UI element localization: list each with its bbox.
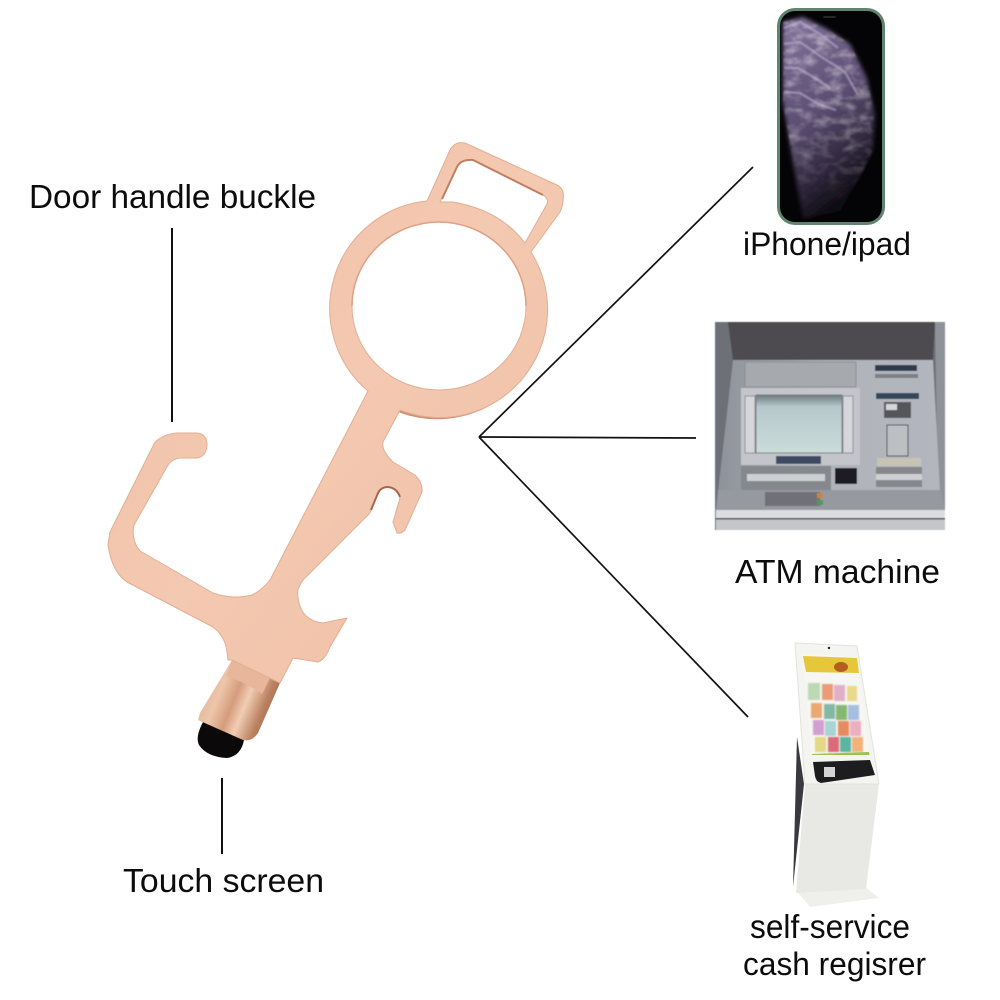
label: iPhone/ipad: iPhone/ipad bbox=[743, 226, 911, 262]
kiosk tile grid bbox=[808, 683, 863, 752]
ATM screen bbox=[756, 395, 842, 453]
label: door handle buckle: Door handle buckle bbox=[29, 179, 316, 216]
icon: self-service kiosk bbox=[793, 643, 879, 907]
key tool bbox=[108, 143, 563, 758]
kiosk dark panel bbox=[813, 760, 875, 783]
kiosk banner art bbox=[834, 662, 848, 672]
key body bbox=[108, 143, 563, 683]
label: touch screen: Touch screen bbox=[123, 863, 324, 900]
kiosk screen bbox=[802, 653, 869, 756]
ATM side buttons bbox=[745, 396, 853, 453]
kiosk reader bbox=[824, 767, 835, 777]
phone wallpaper bbox=[783, 17, 875, 219]
ATM recess top bbox=[728, 322, 935, 360]
ring inner edge shading bbox=[352, 222, 526, 306]
hook inner edge shading bbox=[371, 487, 400, 510]
ATM badge bbox=[776, 456, 821, 464]
kiosk camera bbox=[828, 647, 830, 649]
kiosk head bbox=[795, 643, 879, 784]
ATM face bbox=[718, 360, 940, 492]
label: cash register: cash regisrer bbox=[743, 946, 926, 982]
ATM hood bbox=[745, 362, 856, 387]
phone wallpaper wisps bbox=[784, 22, 858, 110]
line: door handle pointer bbox=[171, 228, 173, 422]
phone wallpaper texture bbox=[783, 17, 875, 205]
ATM screen frame bbox=[741, 388, 860, 465]
icon: phone bbox=[777, 8, 885, 225]
loop inner edge shading bbox=[442, 160, 543, 199]
label: ATM machine: ATM machine bbox=[735, 554, 940, 591]
ATM dark sensor bbox=[835, 468, 857, 484]
kiosk base bbox=[796, 887, 879, 907]
stylus sleeve bbox=[198, 660, 280, 740]
kiosk green strip bbox=[812, 752, 870, 755]
phone speaker bbox=[823, 16, 836, 18]
kiosk banner bbox=[803, 656, 859, 673]
ring outer rim bbox=[400, 312, 545, 418]
ATM keypad bbox=[765, 492, 823, 506]
label: self-service: self-service bbox=[750, 908, 910, 945]
kiosk pedestal bbox=[796, 784, 879, 893]
sleeve fold bbox=[226, 660, 270, 694]
kiosk back bbox=[793, 737, 804, 887]
line: touch screen pointer bbox=[221, 778, 223, 854]
ATM right wall bbox=[935, 322, 945, 510]
fan pointer lines bbox=[479, 167, 753, 717]
ATM counter bbox=[716, 490, 945, 510]
ATM right panel bbox=[875, 365, 922, 487]
icon: ATM machine bbox=[715, 322, 945, 530]
ATM cash dispenser bbox=[741, 466, 831, 490]
stylus tip bbox=[198, 722, 244, 758]
ATM shelf bbox=[716, 510, 945, 530]
